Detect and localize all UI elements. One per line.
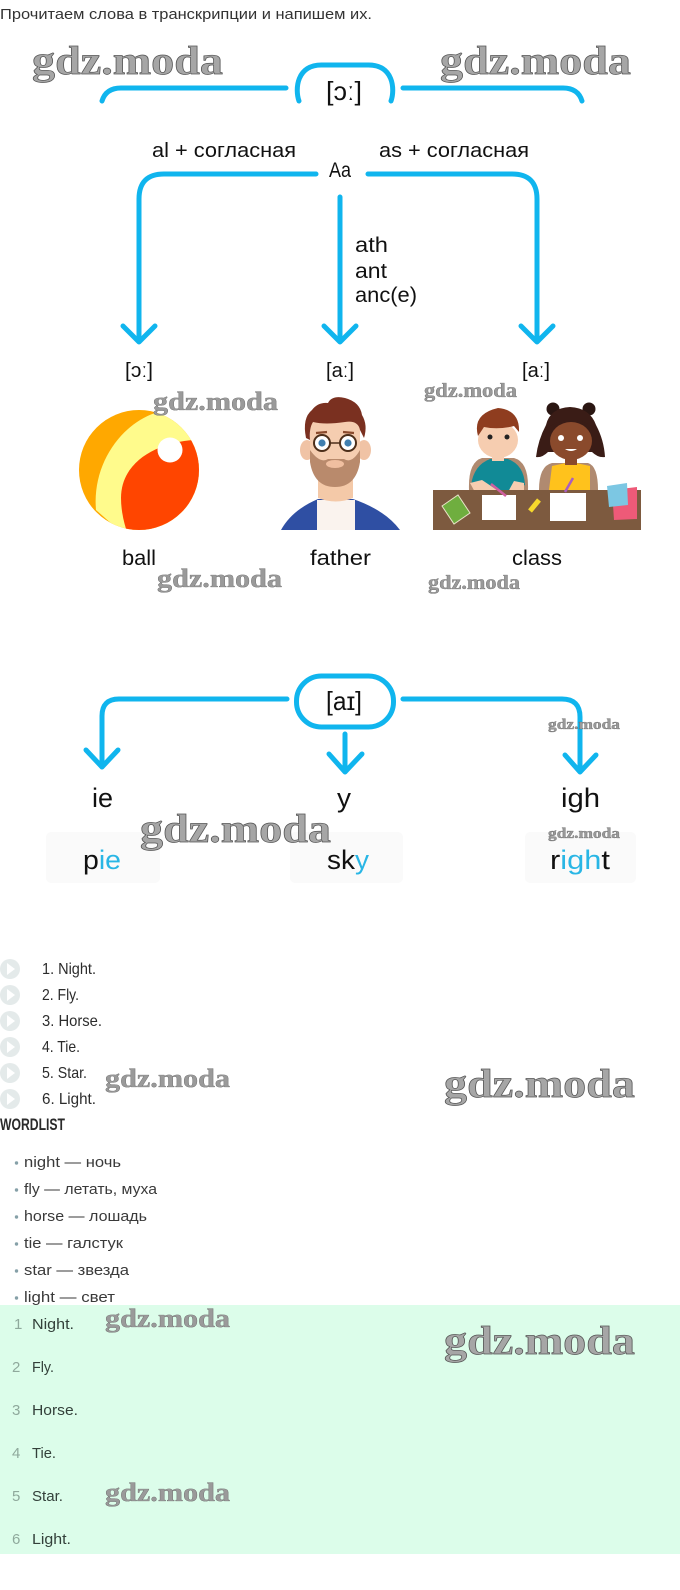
watermarks: gdz.moda <box>440 38 631 83</box>
answer 3 <box>12 1402 78 1419</box>
label: ath ant anc(e): ath <box>355 234 388 257</box>
label: ath ant anc(e): anc(e) <box>355 284 417 307</box>
answer 5: 5 <box>12 1488 20 1505</box>
boy <box>470 408 525 494</box>
answer 6: Light. <box>32 1531 71 1548</box>
label: Aa: Aa <box>329 159 351 182</box>
wordlist: horse — лошадь <box>24 1208 147 1225</box>
label: ath ant anc(e): ant <box>355 260 387 283</box>
desk <box>433 490 641 530</box>
instruction text: Прочитаем слова в транскрипции и напишем их. <box>0 6 372 23</box>
label: al + согласная: al + согласная <box>152 140 296 162</box>
word card: right <box>525 832 636 883</box>
audio row 3: 3. Horse. <box>42 1013 102 1030</box>
transcription labels: [aː] <box>326 360 354 382</box>
watermarks: gdz.moda <box>428 572 520 594</box>
word card: pie <box>46 832 160 883</box>
papers <box>482 495 516 520</box>
heading: y: y <box>337 783 352 813</box>
watermarks: gdz.moda <box>548 826 621 842</box>
icon: children in class <box>433 402 641 530</box>
arrow: ie <box>86 699 287 767</box>
pill: [ɔ:] <box>297 65 393 101</box>
transcription labels: [aː] <box>522 360 550 382</box>
icon: ball <box>79 410 199 530</box>
label: as + согласная: as + согласная <box>379 140 529 162</box>
icon: father portrait <box>281 397 400 530</box>
wordlist: fly — летать, муха <box>24 1181 158 1198</box>
heading: igh: igh <box>561 783 600 813</box>
caption: class: class <box>512 547 562 570</box>
wordlist <box>15 1154 158 1306</box>
answer 2: 2 <box>12 1359 20 1376</box>
caption: ball: ball <box>122 547 156 570</box>
audio row 1: 1. Night. <box>42 961 96 978</box>
audio row 5: 5. Star. <box>42 1065 87 1082</box>
word card: right: right <box>550 845 611 875</box>
answer 2 <box>12 1359 54 1376</box>
answer 1 <box>14 1316 74 1333</box>
wordlist: light — свет <box>24 1289 115 1306</box>
watermarks: gdz.moda <box>140 806 331 851</box>
audio row 3 <box>0 1011 102 1031</box>
watermarks: gdz.moda <box>32 38 223 83</box>
arrow: igh <box>403 699 596 772</box>
caption: father: father <box>310 547 371 570</box>
audio row 2 <box>0 985 79 1005</box>
watermarks: gdz.moda <box>153 387 278 416</box>
wordlist: tie — галстук <box>24 1235 123 1252</box>
audio row 1 <box>0 959 96 979</box>
audio row 4: 4. Tie. <box>42 1039 80 1056</box>
audio row 2: 2. Fly. <box>42 987 79 1004</box>
watermarks: gdz.moda <box>444 1318 635 1363</box>
heading: ie: ie <box>92 783 113 813</box>
watermarks: gdz.moda <box>548 717 621 733</box>
word card: pie: pie <box>83 845 121 875</box>
arrows: Aa branches <box>123 174 553 342</box>
answer 3: 3 <box>12 1402 20 1419</box>
watermarks: gdz.moda <box>157 564 282 593</box>
answer 5 <box>12 1488 63 1505</box>
answer 4 <box>12 1445 56 1462</box>
audio list <box>0 959 102 1109</box>
watermarks: gdz.moda <box>105 1064 230 1093</box>
heading: wordlist: WORDLIST <box>0 1115 65 1134</box>
answer 1: Night. <box>32 1316 74 1333</box>
label: [aɪ]: [aɪ] <box>326 686 362 716</box>
highlighter <box>530 500 539 511</box>
transcription labels: [ɔː] <box>125 360 153 382</box>
chairs <box>469 458 528 490</box>
diagram: sound [ɔ:] header <box>102 65 582 106</box>
connector lines: [ɔ:] <box>102 88 582 101</box>
arrow: y <box>329 734 362 772</box>
wordlist: night — ночь <box>24 1154 121 1171</box>
answer 4: 4 <box>12 1445 20 1462</box>
diagram: sound [aɪ] <box>86 676 596 772</box>
watermarks: gdz.moda <box>444 1061 635 1106</box>
audio row 4 <box>0 1037 80 1057</box>
pencils <box>491 484 506 496</box>
answer 2: Fly. <box>32 1359 54 1376</box>
answer 5: Star. <box>32 1488 63 1505</box>
watermarks: gdz.moda <box>424 380 517 402</box>
word card: sky: sky <box>327 845 370 875</box>
audio row 6 <box>0 1089 96 1109</box>
answer 6 <box>12 1531 71 1548</box>
watermarks: gdz.moda <box>105 1304 230 1333</box>
word card: sky <box>290 832 403 883</box>
label: [ɔ:]: [ɔː] <box>326 76 362 106</box>
green book <box>442 495 470 524</box>
answer 1: 1 <box>14 1316 22 1333</box>
answer 4: Tie. <box>32 1445 56 1462</box>
answer 3: Horse. <box>32 1402 78 1419</box>
books <box>612 487 637 520</box>
girl <box>536 402 605 490</box>
pill: [aɪ] <box>296 676 394 727</box>
label: ath ant anc(e) <box>355 234 417 307</box>
transcription labels <box>125 360 550 382</box>
panel: answers <box>0 1305 680 1554</box>
watermarks: gdz.moda <box>105 1478 230 1507</box>
audio row 5 <box>0 1063 87 1083</box>
answer 6: 6 <box>12 1531 20 1548</box>
wordlist: star — звезда <box>24 1262 130 1279</box>
audio row 6: 6. Light. <box>42 1091 96 1108</box>
